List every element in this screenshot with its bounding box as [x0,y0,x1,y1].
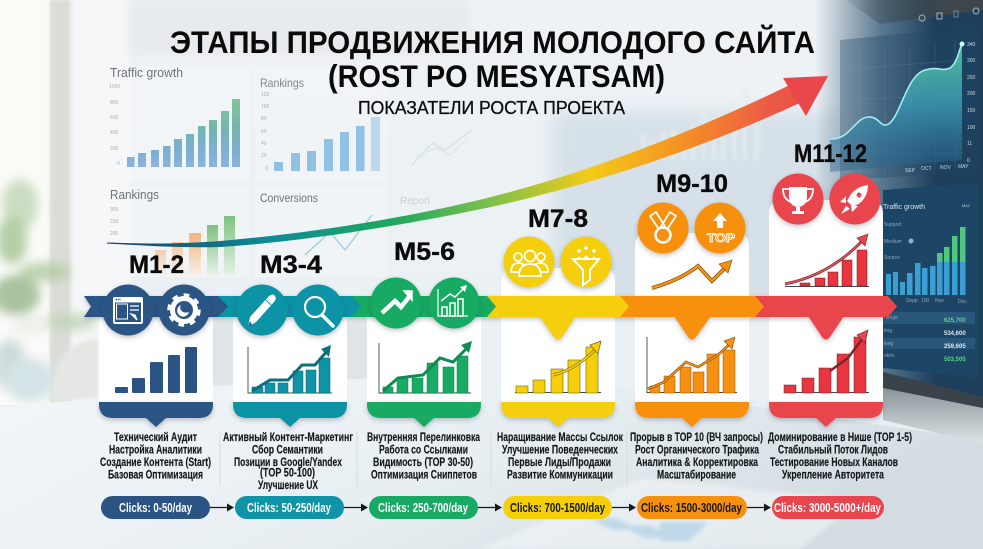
upper line chart panel: SEP [905,168,916,174]
text block: M9-10 tasks: Масштабирование [657,470,736,482]
text block: M7-8 tasks: Улучшение Поведенческих [502,444,618,456]
icon: medal [638,202,688,254]
lower traffic growth panel: 100 [921,298,930,304]
stage labels [129,140,867,279]
lower traffic growth panel: 503,505 [944,357,966,363]
panel: M11-12 card [769,200,883,427]
faint chart panel: rankings: 80 [261,116,267,122]
lower bar chart: M11-12 [784,330,869,393]
panel: M1-2 card [99,300,213,427]
stage labels: M7-8 [528,205,588,233]
stage labels: M1-2 [129,251,184,279]
text block: M5-6 tasks: Оптимизация Сниппетов [371,470,477,482]
faint chart panel: rankings: 0 [265,166,268,172]
pill: clicks 50-250 [235,496,344,519]
pill: clicks 3000-5000+ [772,496,884,519]
bar chart: M9-10 [647,337,737,393]
faint background bar chart [641,88,759,160]
pill: clicks 3000-5000+: Clicks: 3000-5000+/day [774,501,881,515]
text block: M7-8 tasks: Наращивание Массы Ссылок [497,432,623,444]
faint chart panel: rankings: 100 [261,104,270,110]
panel: M9-10 card [635,233,749,427]
faint chart panel: rankings: 40 [261,141,267,147]
text block: M9-10 tasks: Прорыв в TOP 10 (ВЧ запросы) [630,432,763,444]
text block: M3-4 tasks: (TOP 50-100) [260,468,315,480]
text block: M9-10 tasks [630,432,763,482]
text block: M1-2 tasks [100,432,211,482]
faint chart panel: lower rankings: 200 [110,231,119,237]
upper line chart panel [830,8,979,180]
bar chart: M7-8 [515,341,601,393]
faint chart panel: lower rankings: 300 [110,207,119,213]
pill: clicks 1500-3000 [637,496,747,519]
faint chart panel: traffic growth: 200 [110,146,119,152]
icon: magnifier [292,284,344,336]
text block: M5-6 tasks: Внутренняя Перелинковка [367,432,480,444]
lower traffic growth panel: Traffic growth [883,204,925,211]
faint chart panel: lower rankings: 250 [110,219,119,225]
flow arrows between pills [210,504,771,512]
pill: clicks 50-250: Clicks: 50-250/day [247,501,331,515]
upper line chart panel: 100 [967,125,976,131]
lower traffic growth panel: 625,700 [944,318,966,324]
pill: clicks 700-1500: Clicks: 700-1500/day [510,501,605,515]
icon: browser window [102,284,154,336]
bar chart: M1-2 [115,347,197,393]
faint chart panel: traffic growth: Traffic growth [110,66,183,80]
subtitle: ПОКАЗАТЕЛИ РОСТА ПРОЕКТА [358,97,626,118]
upper line chart panel: 200 [967,91,976,97]
text block: M5-6 tasks [367,432,480,482]
lower traffic growth panel: Sepp [906,298,918,304]
upper line chart panel: 250 [967,75,976,81]
lower traffic growth panel: hange [884,315,898,321]
faint report panel: Report [400,196,430,207]
monitor dashboard [800,0,983,444]
lower traffic growth panel: Nov [935,298,944,304]
text block: M7-8 tasks: Первые Лиды/Продажи [508,457,611,469]
faint chart panel: conversions [255,187,388,277]
upper line chart panel: 11 [967,141,972,147]
text block: M11-12 tasks: Доминирование в Нише (TOP 1-5) [768,432,912,444]
lower traffic growth panel: Support [884,222,902,228]
upper bar chart: M11-12 [785,234,869,286]
text block: M5-6 tasks: Видимость (TOP 30-50) [373,457,473,469]
timeline band [84,296,897,340]
stage labels: M9-10 [656,170,728,198]
faint report panel [400,130,472,207]
faint chart panel: traffic growth: 600 [110,115,119,121]
pill: clicks 250-700: Clicks: 250-700/day [378,501,468,515]
pill: clicks 250-700 [369,496,478,519]
bar chart: M5-6 [379,341,472,393]
lower traffic growth panel: Dec [958,299,967,305]
lower traffic growth panel: 259,605 [944,344,966,350]
icon: top arrow [694,202,746,254]
faint chart panel: traffic growth: 400 [110,130,119,136]
text block: M1-2 tasks: Базовая Оптимизация [108,470,203,482]
text block: M11-12 tasks: Укрепление Авторитета [782,470,884,482]
upper line chart panel: 150 [967,108,976,114]
icon: gear [158,284,210,336]
text block: M9-10 tasks: Аналитика & Корректировка [636,457,758,469]
stage labels: M11-12 [794,140,867,168]
text block: M7-8 tasks: Развитие Коммуникации [507,470,613,482]
text block: M7-8 tasks [497,432,623,482]
icon: pen [236,284,288,336]
text block: M11-12 tasks: Стабильный Поток Лидов [778,444,888,456]
text block: M1-2 tasks: Настройка Аналитики [109,444,202,456]
main growth arrow [107,76,828,247]
bar chart: M3-4 [248,345,332,393]
panel: M5-6 card [367,300,481,427]
icon: funnel [560,236,612,288]
lower traffic growth panel: ting [884,328,892,334]
upper line chart panel: 300 [967,58,976,64]
text block: M9-10 tasks: Рост Органического Трафика [635,444,759,456]
text block: M3-4 tasks: Улучшение UX [258,480,318,492]
text block: M3-4 tasks: Позиции в Google/Yandex [234,457,342,469]
lower traffic growth panel: M42 [962,203,971,208]
upper line chart panel: NOV [940,165,952,171]
upper line chart panel: OCT [921,166,932,172]
text block: M1-2 tasks: Технический Аудит [114,432,197,444]
icon: rocket [830,174,880,224]
text block: M3-4 tasks: Сбор Семантики [252,444,323,456]
pill: clicks 1500-3000: Clicks: 1500-3000/day [641,501,742,515]
faint chart panel: lower rankings [110,187,250,277]
pill: clicks 700-1500 [503,496,612,519]
faint chart panel: traffic growth: 0 [117,161,120,167]
title: (ROST PO MESYATSAM) [328,58,665,94]
text block: M11-12 tasks [768,432,912,482]
faint chart panel: rankings: 120 [261,92,270,98]
lower traffic growth panel: king [884,341,893,347]
upper line chart panel: 0 [967,158,970,164]
faint chart panel: rankings: 20 [261,153,267,159]
faint chart panel: traffic growth: 800 [110,100,119,106]
title [170,24,815,94]
small arrow: M9-10 [652,260,732,288]
panel: M3-4 card [233,300,347,427]
lower traffic growth panel: Medium [884,239,902,245]
icon: top arrow: TOP [707,231,735,245]
faint chart panel: rankings: Rankings [260,76,304,90]
upper line chart panel: MAY [958,164,969,170]
faint chart panel: rankings [255,68,388,182]
lower traffic growth panel [883,183,978,378]
stage labels: M5-6 [394,238,455,266]
faint chart panel: rankings: 60 [261,129,267,135]
title: ЭТАПЫ ПРОДВИЖЕНИЯ МОЛОДОГО САЙТА [170,24,815,60]
lower traffic growth panel: okes [884,353,895,359]
faint chart panel: traffic growth: 1000 [109,84,120,90]
upper line chart panel: 340 [967,42,976,48]
text block: M11-12 tasks: Тестирование Новых Каналов [770,457,898,469]
icon: chart with arrow [428,278,480,328]
faint chart panel: traffic growth [109,66,250,182]
icon: people [504,236,554,288]
icon: trend arrow [370,278,422,328]
faint chart panel: lower rankings: Rankings [110,188,159,202]
lower traffic growth panel: 534,600 [944,331,966,337]
icon: trophy [772,174,824,224]
faint chart panel: conversions: Conversions [260,191,318,205]
text block: M3-4 tasks [223,432,353,492]
text block: M3-4 tasks: Активный Контент-Маркетинг [223,432,353,444]
text block: M1-2 tasks: Создание Контента (Start) [100,457,211,469]
pill: clicks 0-50: Clicks: 0-50/day [119,501,192,515]
text block: M5-6 tasks: Работа со Ссылками [379,444,468,456]
panel: M7-8 card [501,268,615,427]
lower traffic growth panel: Source [884,255,900,261]
stage labels: M3-4 [260,251,322,279]
pill: clicks 0-50 [101,496,210,519]
